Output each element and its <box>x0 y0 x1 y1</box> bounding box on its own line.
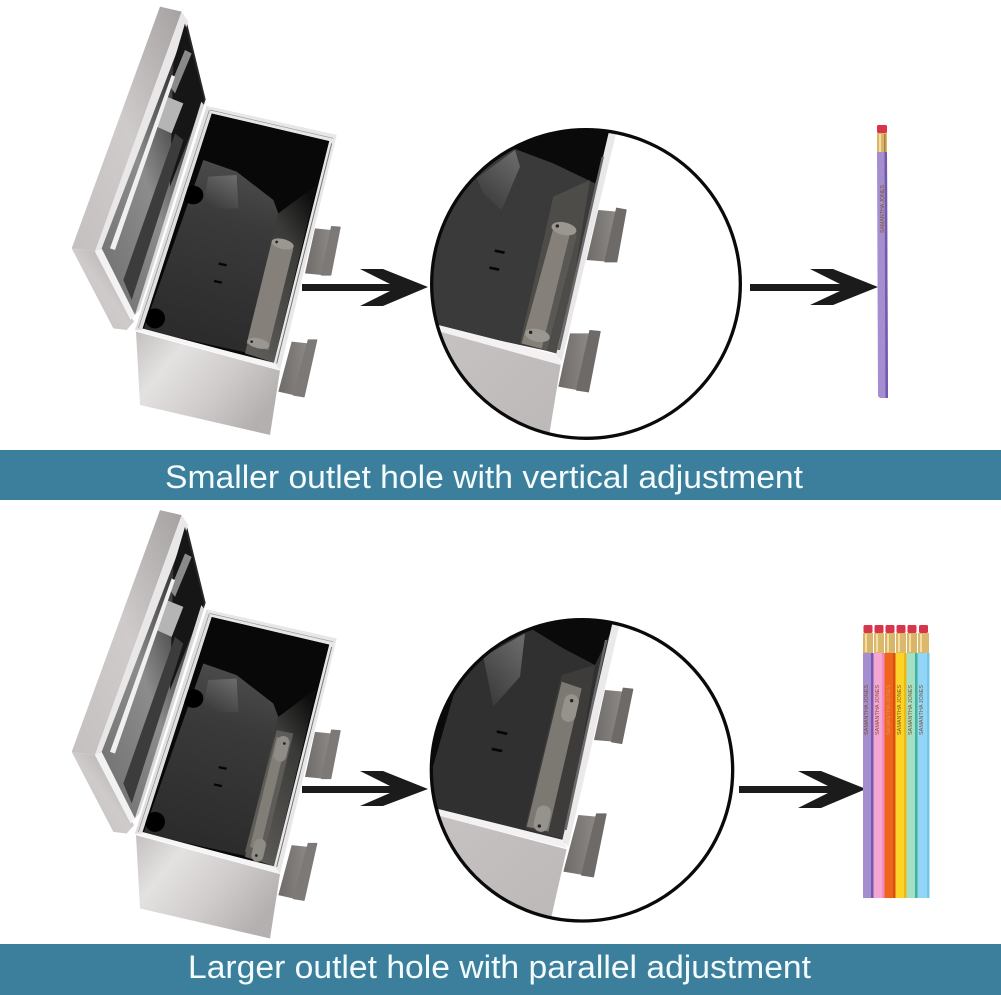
zoom circle: larger hole detail <box>430 618 734 923</box>
caption banner: top <box>0 450 1001 500</box>
pencil: mint: SAMANTHA JONES <box>908 684 914 735</box>
pencil: orange <box>884 625 896 898</box>
arrow: box to zoom circle, top <box>302 269 428 306</box>
caption banner: bottom <box>0 944 1001 995</box>
caption banner: bottom: Larger outlet hole with parallel adjustment <box>188 949 811 985</box>
pencil: blue <box>918 625 930 898</box>
pencil: purple <box>863 625 874 898</box>
product photo: open box, smaller hole <box>72 7 340 435</box>
arrow: box to zoom circle, bottom <box>302 771 428 806</box>
pencil: orange: SAMANTHA JONES <box>886 684 892 735</box>
single pencil: SAMANTHA JONES <box>880 184 886 233</box>
six colored pencils <box>863 625 930 898</box>
pencil: purple: SAMANTHA JONES <box>864 684 870 735</box>
caption banner: top: Smaller outlet hole with vertical adjustment <box>165 459 803 495</box>
pencil: blue: SAMANTHA JONES <box>919 684 925 735</box>
parallel adjustment strip <box>245 730 293 863</box>
pencil: pink <box>874 625 884 898</box>
zoom circle: smaller hole detail <box>430 128 742 440</box>
arrow: zoom circle to pencil, top <box>750 269 878 305</box>
pencil: mint <box>906 625 918 898</box>
pencil: pink: SAMANTHA JONES <box>875 684 881 735</box>
pencil: yellow: SAMANTHA JONES <box>897 684 903 735</box>
product photo: open box, larger hole <box>72 510 340 938</box>
pencil: yellow <box>896 625 906 898</box>
arrow: zoom circle to pencils, bottom <box>739 771 866 808</box>
vertical adjustment strip <box>246 236 295 351</box>
single pencil <box>877 125 888 398</box>
